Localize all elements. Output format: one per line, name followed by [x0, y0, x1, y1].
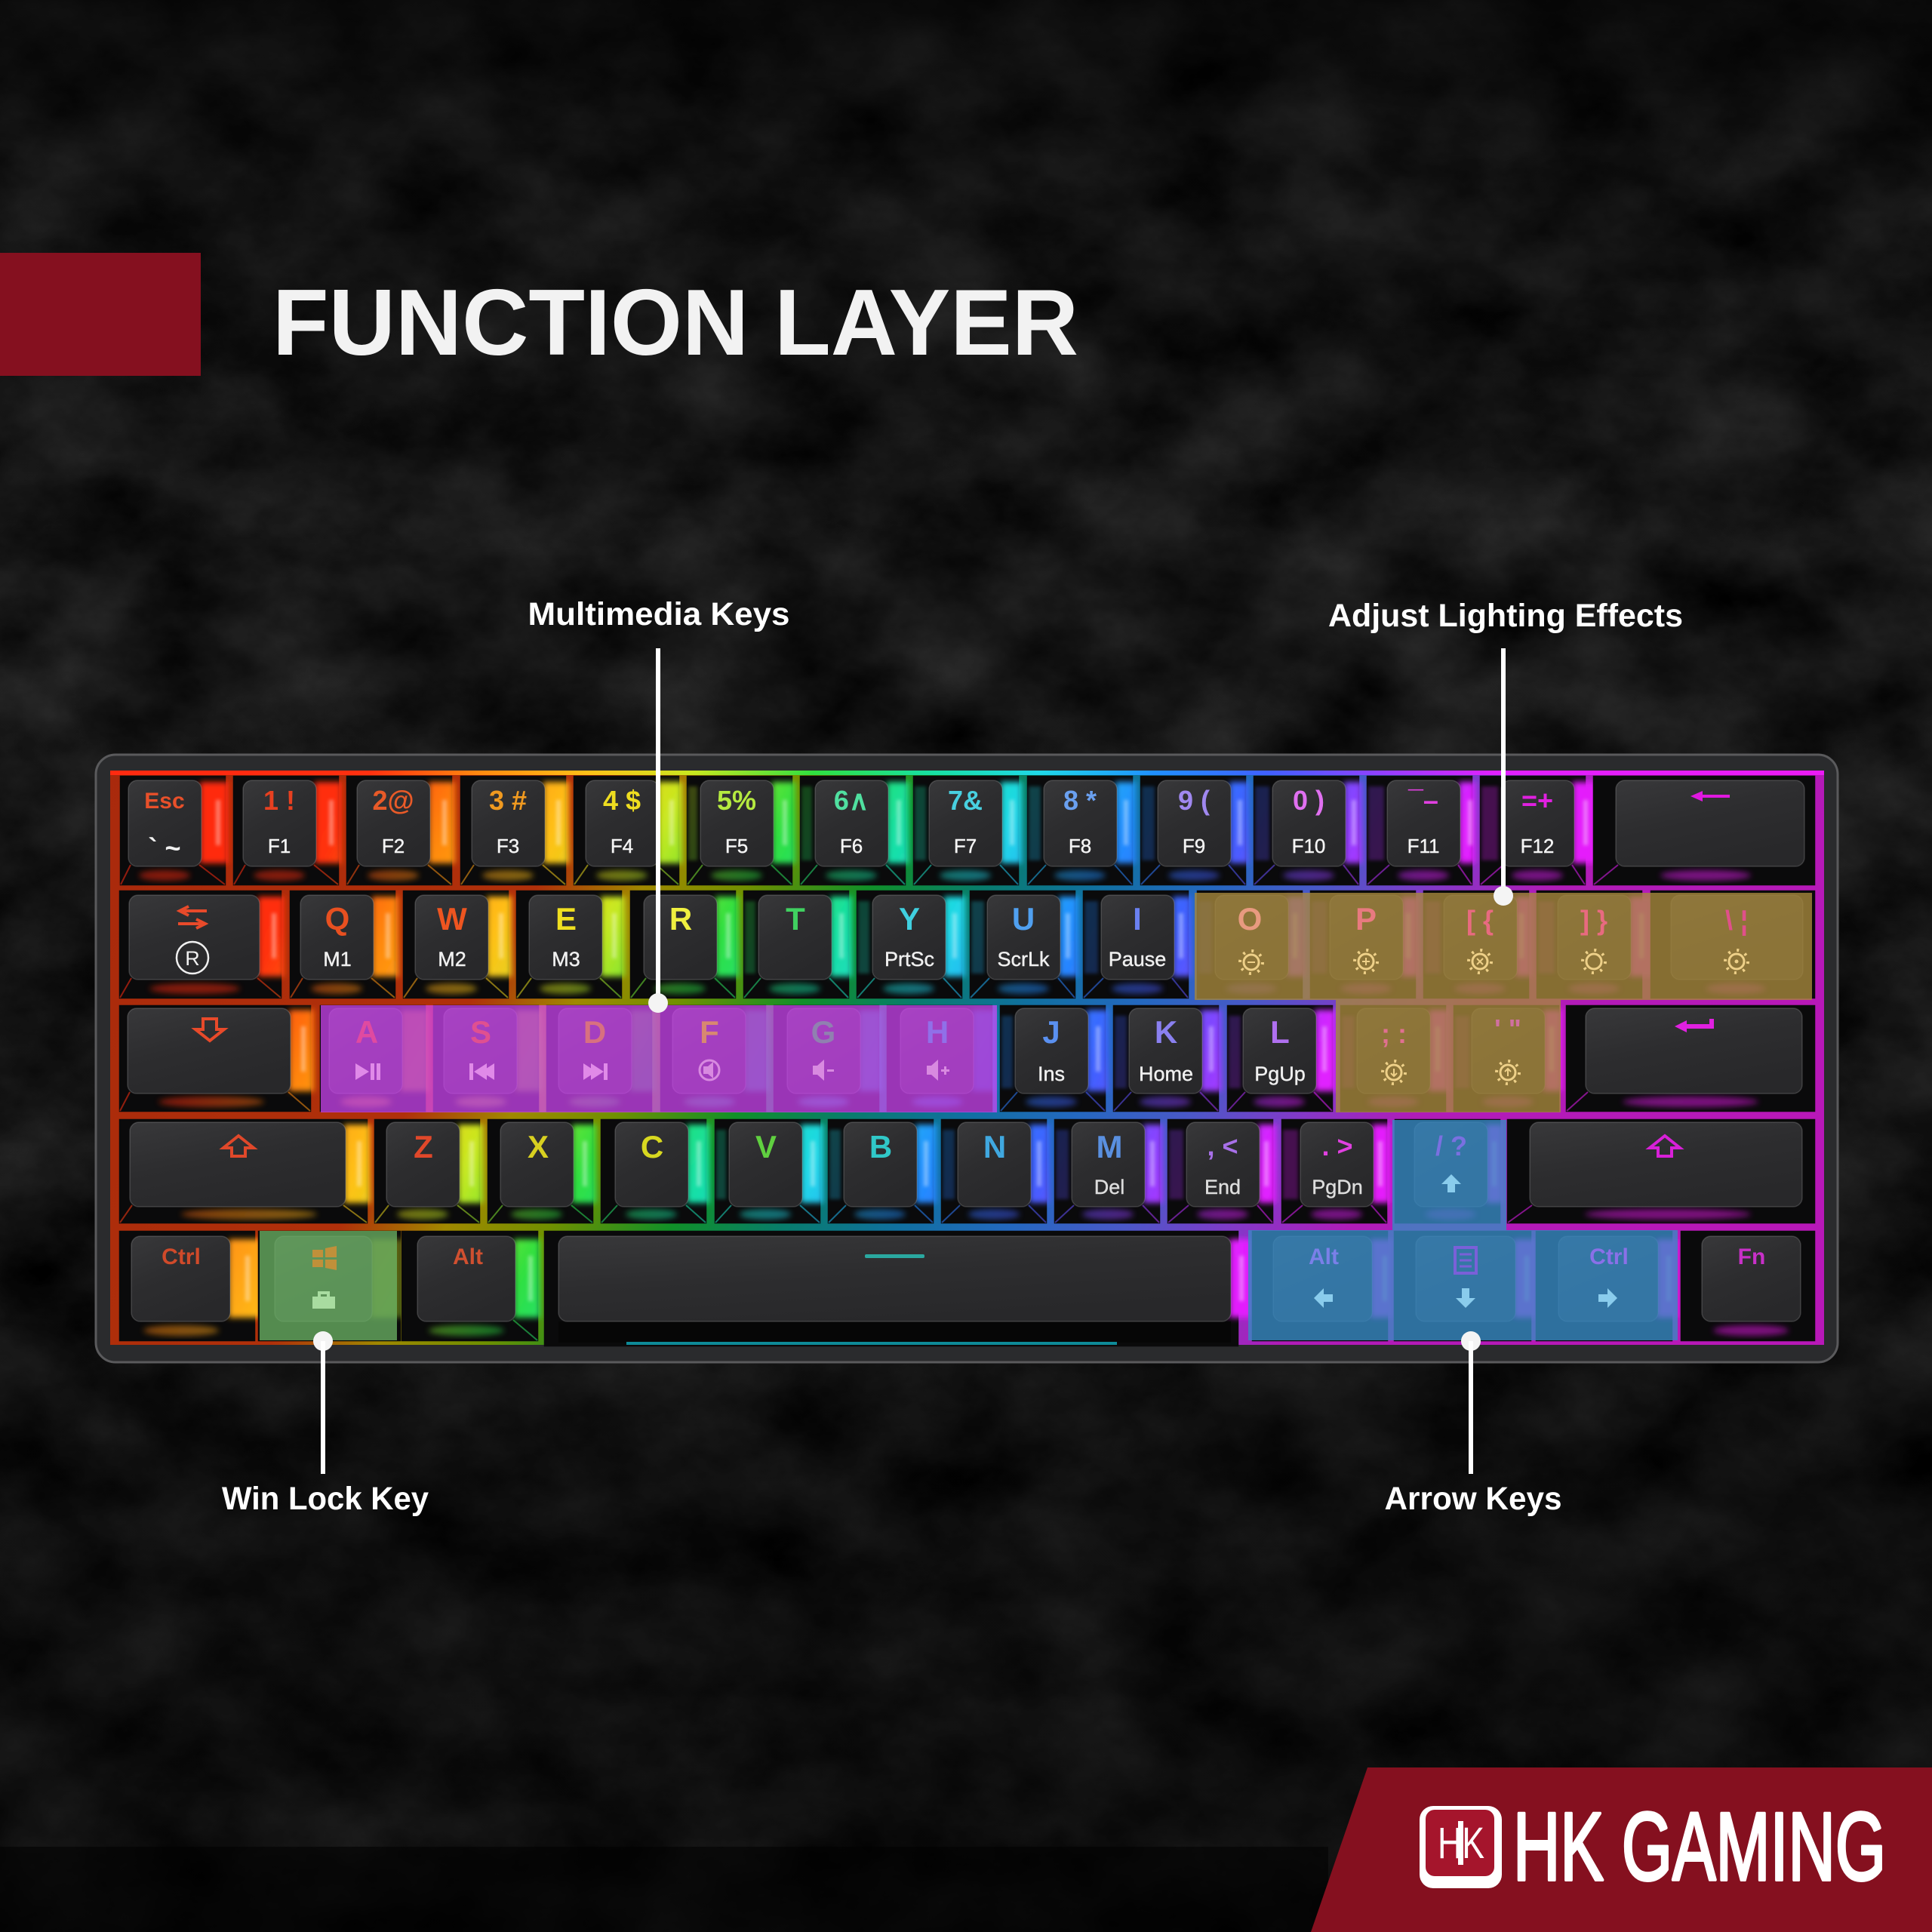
- icon: down arrow: [1456, 1288, 1475, 1308]
- key: Q: [291, 891, 395, 998]
- icon: volume down: [813, 1060, 834, 1081]
- icon: up arrow: [1441, 1174, 1461, 1192]
- key: F1: [234, 777, 339, 884]
- key: Y: [857, 891, 962, 998]
- key: F8: F8: [1069, 835, 1091, 857]
- icon: menu: [1455, 1247, 1476, 1273]
- key: Z: [375, 1120, 480, 1223]
- key: semicolon base: [1341, 1006, 1446, 1111]
- highlight: multimedia keys: D: [583, 1014, 606, 1050]
- key: Left Alt: Alt: [453, 1244, 483, 1269]
- key: Y: Y: [899, 901, 920, 937]
- key: F9: F9: [1183, 835, 1205, 857]
- icon: play pause: [355, 1063, 380, 1080]
- icon: next track: [583, 1063, 608, 1080]
- icon: volume up: [927, 1060, 949, 1081]
- logo panel: [1311, 1767, 1932, 1932]
- key: P base: [1311, 891, 1416, 998]
- key: Esc: ` ~: [148, 832, 181, 863]
- key: Menu base: [1395, 1232, 1534, 1340]
- key: Tab: R: [185, 947, 200, 970]
- key: F7: [914, 777, 1019, 884]
- callout: adjust lighting effects: Adjust Lighting Effects: [1328, 598, 1683, 634]
- key: period: . >: [1321, 1131, 1353, 1161]
- highlight: multimedia keys: G: [811, 1014, 835, 1050]
- key: Q: M1: [323, 948, 352, 971]
- key: J: J: [1042, 1014, 1060, 1050]
- callout: multimedia keys: Multimedia Keys: [528, 596, 789, 632]
- key: F8: [1028, 777, 1133, 884]
- icon: effect sun quote: [1497, 1061, 1519, 1084]
- key: U: ScrLk: [997, 948, 1050, 971]
- icon: effect sun close bracket: [1583, 950, 1605, 973]
- key: F9: [1141, 777, 1246, 884]
- key: F5: 5%: [717, 785, 756, 816]
- key: F4: 4 $: [603, 785, 641, 816]
- key: M: Del: [1094, 1176, 1124, 1198]
- highlight: lighting effect keys: \ ¦: [1725, 905, 1748, 936]
- icon: logo keycap: HK: [1438, 1819, 1484, 1868]
- key: Backspace: [1594, 777, 1814, 884]
- key: E: E: [555, 901, 577, 937]
- highlight: arrow keys: / ?: [1435, 1131, 1467, 1161]
- key: F5: [688, 777, 792, 884]
- key: F10: F10: [1292, 835, 1325, 857]
- key: F12: F12: [1521, 835, 1554, 857]
- key: F3: 3 #: [489, 785, 527, 816]
- icon: left arrow: [1314, 1288, 1333, 1308]
- key: K: K: [1155, 1014, 1177, 1050]
- key: F10: 0 ): [1293, 785, 1324, 816]
- key: K: Home: [1139, 1063, 1193, 1085]
- key: F12: [1481, 777, 1594, 884]
- highlight: multimedia keys: A: [355, 1014, 378, 1050]
- key: J: Ins: [1038, 1063, 1065, 1085]
- key: ] base: [1537, 891, 1651, 998]
- highlight: lighting effect keys: O: [1238, 901, 1262, 937]
- key: F6: [801, 777, 906, 884]
- key: L: L: [1270, 1014, 1290, 1050]
- key: C: [601, 1120, 706, 1223]
- key: Caps: [120, 1006, 311, 1111]
- key: F7: F7: [954, 835, 977, 857]
- key: F6: 6∧: [834, 785, 869, 816]
- icon: windows logo: [312, 1246, 337, 1270]
- key: Left Alt: [402, 1232, 537, 1340]
- key: F6: F6: [840, 835, 863, 857]
- key: comma: , <: [1207, 1131, 1238, 1161]
- icon: lock: [312, 1291, 335, 1309]
- icon: effect sun P: [1355, 950, 1377, 973]
- key: F11: [1367, 777, 1472, 884]
- icon: effect sun semicolon: [1383, 1061, 1405, 1084]
- icon: right arrow: [1598, 1288, 1617, 1308]
- icon: effect sun bracket: [1469, 950, 1491, 973]
- key: Right Ctrl base: [1537, 1232, 1675, 1340]
- callout: arrow keys: [1384, 1331, 1562, 1517]
- highlight: arrow keys: Ctrl: [1589, 1244, 1629, 1269]
- title: FUNCTION LAYER: [272, 271, 1078, 375]
- key: Space: [545, 1232, 1248, 1346]
- key: Esc: Esc: [144, 789, 185, 814]
- key: F3: F3: [497, 835, 519, 857]
- key: J: [1001, 1006, 1106, 1111]
- highlight: multimedia keys: [321, 1005, 997, 1112]
- key: F2: F2: [382, 835, 405, 857]
- key: Enter: [1567, 1006, 1814, 1111]
- highlight: arrow keys: [1248, 1120, 1678, 1340]
- key: I: Pause: [1109, 948, 1166, 971]
- icon: logo keycap: [1420, 1806, 1502, 1888]
- key: A base: [321, 1006, 426, 1111]
- key: F2: 2@: [372, 785, 414, 816]
- highlight: lighting effect keys: ; :: [1381, 1018, 1407, 1049]
- icon: previous track: [469, 1063, 494, 1080]
- highlight: win lock key: [260, 1231, 397, 1340]
- key: Left Ctrl: Ctrl: [162, 1244, 201, 1269]
- key: comma: [1168, 1120, 1273, 1223]
- key: L: [1228, 1006, 1333, 1111]
- top led strip: [110, 771, 1824, 775]
- key: C: C: [641, 1129, 663, 1164]
- key: U: [971, 891, 1075, 998]
- key: F8: 8 *: [1063, 785, 1097, 816]
- icon: effect sun backslash: [1725, 950, 1748, 973]
- key: E: [517, 891, 622, 998]
- key: Right Alt base: [1253, 1232, 1390, 1340]
- key: I: I: [1133, 901, 1142, 937]
- highlight: lighting effect keys: ] }: [1580, 905, 1607, 936]
- highlight: lighting effect keys: ' ": [1494, 1014, 1521, 1044]
- key: T: T: [786, 901, 805, 937]
- key: V: V: [755, 1129, 777, 1164]
- keyboard frame: [96, 755, 1838, 1362]
- led board: [110, 771, 1824, 1345]
- key: Right Shift: [1508, 1120, 1814, 1223]
- bottom led strip under spacebar: [626, 1342, 1117, 1345]
- highlight: multimedia keys: F: [700, 1014, 719, 1050]
- callout: win lock key: Win Lock Key: [222, 1481, 429, 1517]
- key: N: N: [983, 1129, 1006, 1164]
- key: T: [744, 891, 849, 998]
- key: F11: ¯–: [1407, 785, 1438, 816]
- key: Fn: [1681, 1232, 1814, 1340]
- key: F12: =+: [1521, 785, 1553, 816]
- key: F5: F5: [725, 835, 748, 857]
- key: D base: [547, 1006, 652, 1111]
- key: Y: PrtSc: [884, 948, 934, 971]
- keyboard: [96, 755, 1838, 1362]
- key: H base: [888, 1006, 992, 1111]
- key: M: M: [1096, 1129, 1123, 1164]
- highlight: lighting effect keys: [1195, 893, 1812, 1112]
- key: X: X: [528, 1129, 549, 1164]
- key: L: PgUp: [1254, 1063, 1306, 1085]
- highlight: lighting effect keys: P: [1355, 901, 1377, 937]
- callout: arrow keys: Arrow Keys: [1384, 1481, 1562, 1517]
- key: F4: [574, 777, 679, 884]
- key: I: [1084, 891, 1189, 998]
- key: R: [631, 891, 736, 998]
- key: F4: F4: [611, 835, 633, 857]
- key: F3: [461, 777, 566, 884]
- key: X: [488, 1120, 593, 1223]
- key: Win base: [259, 1232, 401, 1340]
- key: K: [1114, 1006, 1219, 1111]
- key: N: [942, 1120, 1047, 1223]
- callout: adjust lighting effects: [1328, 598, 1683, 906]
- key: Tab: [120, 891, 281, 998]
- key: Esc: [121, 777, 226, 884]
- key: S base: [434, 1006, 539, 1111]
- key: Z: Z: [414, 1129, 433, 1164]
- key: F1: F1: [268, 835, 291, 857]
- key: Left Shift: [120, 1120, 368, 1223]
- key: period: PgDn: [1312, 1176, 1363, 1198]
- key: M: [1055, 1120, 1160, 1223]
- highlight: multimedia keys: H: [926, 1014, 949, 1050]
- key: W: W: [437, 901, 467, 937]
- key: F9: 9 (: [1178, 785, 1210, 816]
- key: period: [1282, 1120, 1387, 1223]
- key: F11: F11: [1407, 835, 1439, 857]
- key: Left Ctrl: [120, 1232, 259, 1340]
- key: B: B: [869, 1129, 892, 1164]
- key: F1: 1 !: [263, 785, 295, 816]
- key: G base: [774, 1006, 879, 1111]
- callout: win lock key: [222, 1331, 429, 1517]
- key: quote base: [1454, 1006, 1559, 1111]
- key: W: M2: [438, 948, 466, 971]
- key: W: [404, 891, 509, 998]
- key: B: [829, 1120, 934, 1223]
- key: F2: [347, 777, 452, 884]
- key: [ base: [1424, 891, 1529, 998]
- key: slash base: [1395, 1120, 1500, 1223]
- key: Q: Q: [325, 901, 349, 937]
- key: F7: 7&: [948, 785, 983, 816]
- key: V: [715, 1120, 820, 1223]
- key: F10: [1254, 777, 1359, 884]
- key: U: U: [1012, 901, 1035, 937]
- callout: multimedia keys: [528, 596, 789, 1013]
- key: F base: [661, 1006, 766, 1111]
- key: backslash base: [1651, 891, 1814, 998]
- key: comma: End: [1204, 1176, 1241, 1198]
- key: R: R: [669, 901, 692, 937]
- key: Fn: Fn: [1738, 1244, 1765, 1269]
- key: O base: [1198, 891, 1303, 998]
- icon: mute: [700, 1060, 719, 1080]
- highlight: lighting effect keys: [ {: [1466, 905, 1494, 936]
- highlight: multimedia keys: S: [470, 1014, 491, 1050]
- key: E: M3: [552, 948, 580, 971]
- icon: effect sun O: [1240, 951, 1263, 974]
- title accent bar: [0, 253, 201, 376]
- highlight: arrow keys: Alt: [1309, 1244, 1339, 1269]
